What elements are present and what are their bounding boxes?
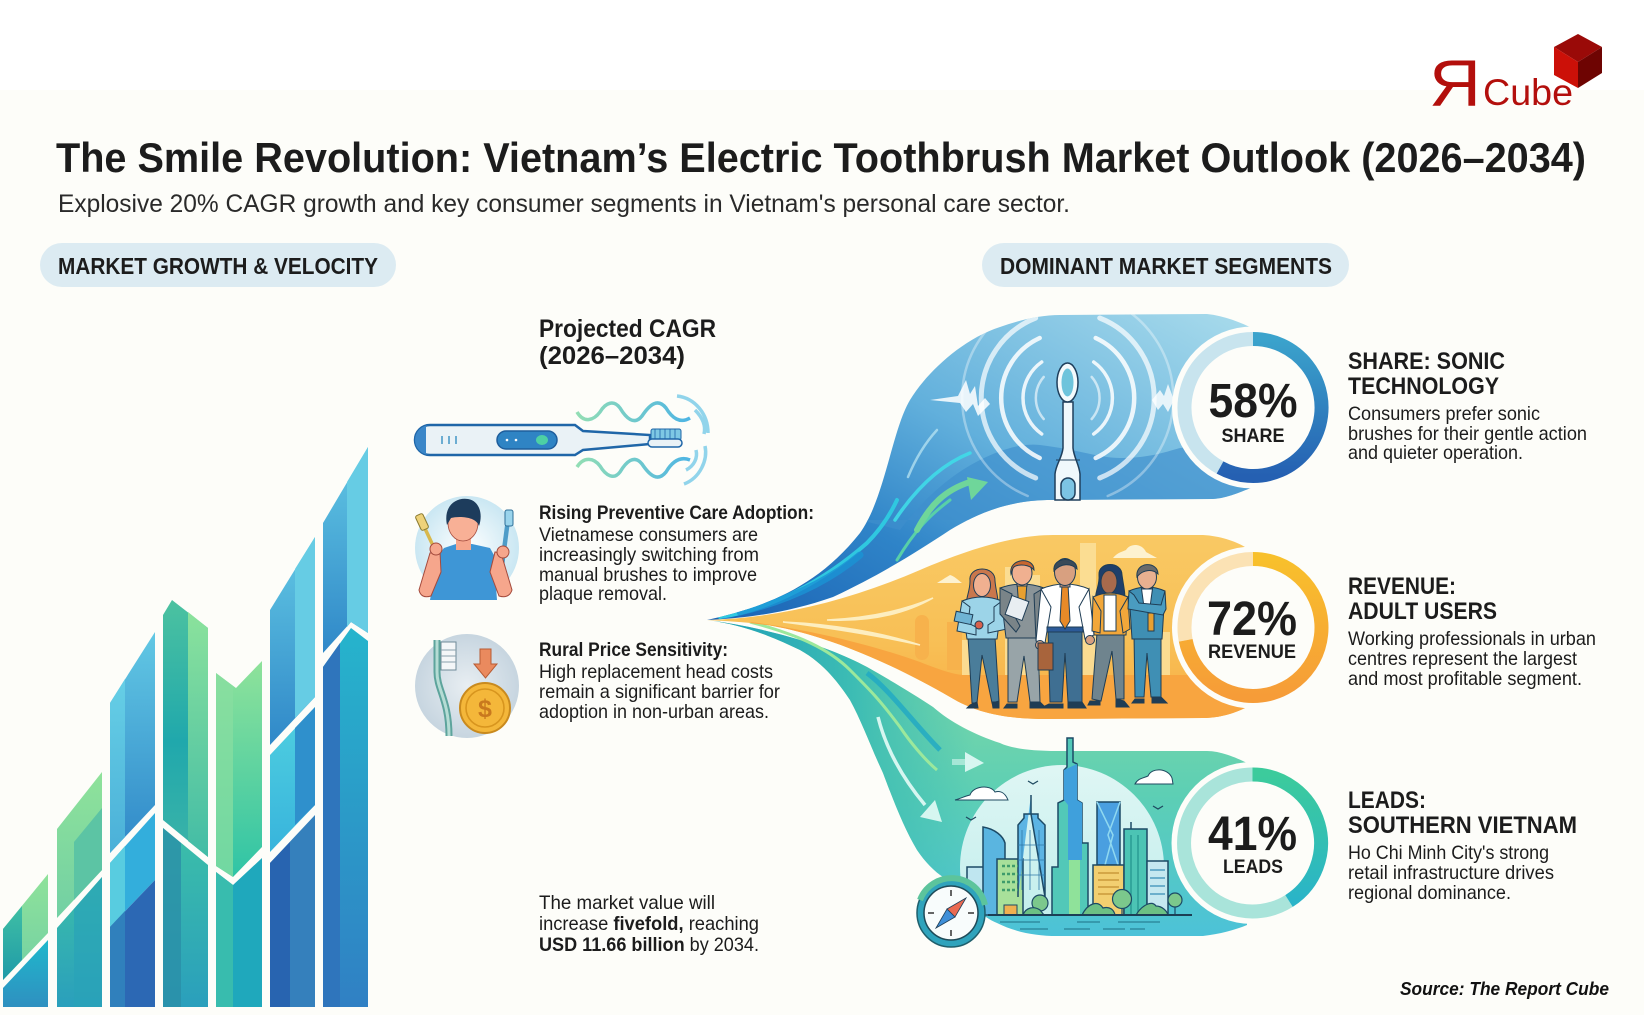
text block: rural price sensitivity: High replacement head costs <box>539 661 773 683</box>
donut: 58 percent share: 58% <box>1208 375 1298 428</box>
text block: market value: increase fivefold, reaching <box>539 913 759 935</box>
CAGR heading: (2026–2034) <box>539 342 685 370</box>
person 4 <box>1088 564 1130 707</box>
panel: teal stream for southern Vietnam <box>707 620 1247 936</box>
text block: rural price sensitivity: adoption in non-urban areas. <box>539 701 769 723</box>
person 5 <box>1128 565 1167 703</box>
title: The Smile Revolution: Vietnam’s Electric Toothbrush Market Outlook (2026–2034) <box>56 134 1586 181</box>
text block: rising preventive care adoption: increasingly switching from <box>539 544 759 566</box>
person 3 <box>1036 558 1094 708</box>
text block: revenue adult users: and most profitable segment. <box>1348 668 1582 690</box>
icon: toothbrush, arrow and coin <box>415 634 519 738</box>
text block: leads southern Vietnam: regional dominance. <box>1348 882 1511 904</box>
bar 1 <box>3 874 48 1007</box>
subtitle: Explosive 20% CAGR growth and key consumer segments in Vietnam's personal care sector. <box>58 190 1070 218</box>
source note: Source: The Report Cube <box>1400 979 1609 999</box>
text block: leads southern Vietnam: SOUTHERN VIETNAM <box>1348 812 1577 839</box>
text block: revenue adult users: centres represent the largest <box>1348 648 1578 670</box>
text block: share sonic technology <box>1348 348 1587 464</box>
icon: electric toothbrush with vibration waves <box>415 396 708 484</box>
stream highlights and arrows <box>750 622 984 822</box>
text block: leads southern Vietnam: Ho Chi Minh City's strong <box>1348 842 1549 864</box>
donut: 58 percent share <box>1172 326 1334 488</box>
text block: revenue adult users: REVENUE: <box>1348 573 1456 600</box>
text block: leads southern Vietnam: LEADS: <box>1348 787 1426 814</box>
text block: market value: USD 11.66 billion by 2034. <box>539 934 759 956</box>
text block: revenue adult users: Working professionals in urban <box>1348 628 1596 650</box>
text block: revenue adult users: ADULT USERS <box>1348 598 1497 625</box>
text block: share sonic technology: brushes for their gentle action <box>1348 423 1587 445</box>
icon: compass <box>917 878 985 947</box>
panel: orange stream for adult users <box>707 535 1245 725</box>
text block: rural price sensitivity <box>539 639 780 723</box>
section heading: market growth and velocity <box>40 243 396 287</box>
CAGR heading: Projected CAGR <box>539 315 716 343</box>
logo: RCube <box>1429 34 1602 120</box>
logo: RCube: Я <box>1429 46 1481 120</box>
icon: toothbrush, arrow and coin: $ <box>478 695 492 723</box>
CAGR heading <box>539 315 716 370</box>
text block: rising preventive care adoption: Rising Preventive Care Adoption: <box>539 502 814 524</box>
trees <box>1023 890 1182 915</box>
bar 2 <box>57 772 102 1007</box>
donut: 72 percent revenue <box>1172 546 1334 708</box>
section heading: market growth and velocity: MARKET GROWTH & VELOCITY <box>58 253 378 279</box>
icon: sonic toothbrush <box>1055 363 1080 500</box>
section heading: dominant market segments <box>982 243 1349 287</box>
text block: market value <box>539 892 759 956</box>
donut: 41 percent leads: 41% <box>1208 808 1297 861</box>
text block: market value: The market value will <box>539 892 715 914</box>
text block: share sonic technology: and quieter operation. <box>1348 442 1523 464</box>
illustration: Ho Chi Minh City skyline <box>954 737 1192 930</box>
logo: RCube: Cube <box>1483 72 1573 113</box>
text block: rising preventive care adoption <box>539 502 814 605</box>
text block: revenue adult users <box>1348 573 1596 690</box>
clouds <box>955 770 1173 800</box>
donut: 72 percent revenue: 72% <box>1207 593 1297 646</box>
bar chart: rising market growth <box>3 447 368 1007</box>
bar 5 <box>216 661 262 1007</box>
text block: share sonic technology: SHARE: SONIC <box>1348 348 1505 375</box>
donut: 58 percent share: SHARE <box>1222 426 1284 447</box>
text block: leads southern Vietnam <box>1348 787 1577 904</box>
donut: 41 percent leads: LEADS <box>1223 857 1283 878</box>
bar 4 <box>163 600 208 1007</box>
text block: leads southern Vietnam: retail infrastructure drives <box>1348 862 1554 884</box>
text block: rural price sensitivity: Rural Price Sensitivity: <box>539 639 728 661</box>
donut: 41 percent leads <box>1172 762 1334 924</box>
text block: share sonic technology: Consumers prefer sonic <box>1348 403 1540 425</box>
background city and streaks <box>750 543 1245 725</box>
bar 7 <box>323 447 368 1007</box>
text block: rising preventive care adoption: manual brushes to improve <box>539 564 757 586</box>
buildings <box>967 738 1168 915</box>
donut: 72 percent revenue: REVENUE <box>1208 642 1296 663</box>
text block: share sonic technology: TECHNOLOGY <box>1348 373 1499 400</box>
section heading: dominant market segments: DOMINANT MARKET SEGMENTS <box>1000 253 1332 279</box>
panel: blue stream for sonic technology <box>707 300 1260 620</box>
text block: rural price sensitivity: remain a significant barrier for <box>539 681 780 703</box>
bar 3 <box>110 632 155 1007</box>
text block: rising preventive care adoption: plaque removal. <box>539 583 667 605</box>
bar 6 <box>270 537 315 1007</box>
person 2 <box>1000 561 1046 708</box>
icon: person holding two toothbrushes <box>415 496 519 600</box>
person 1 <box>954 569 1007 708</box>
text block: rising preventive care adoption: Vietnamese consumers are <box>539 524 758 546</box>
sound waves, streaks and arrow <box>720 300 1260 617</box>
